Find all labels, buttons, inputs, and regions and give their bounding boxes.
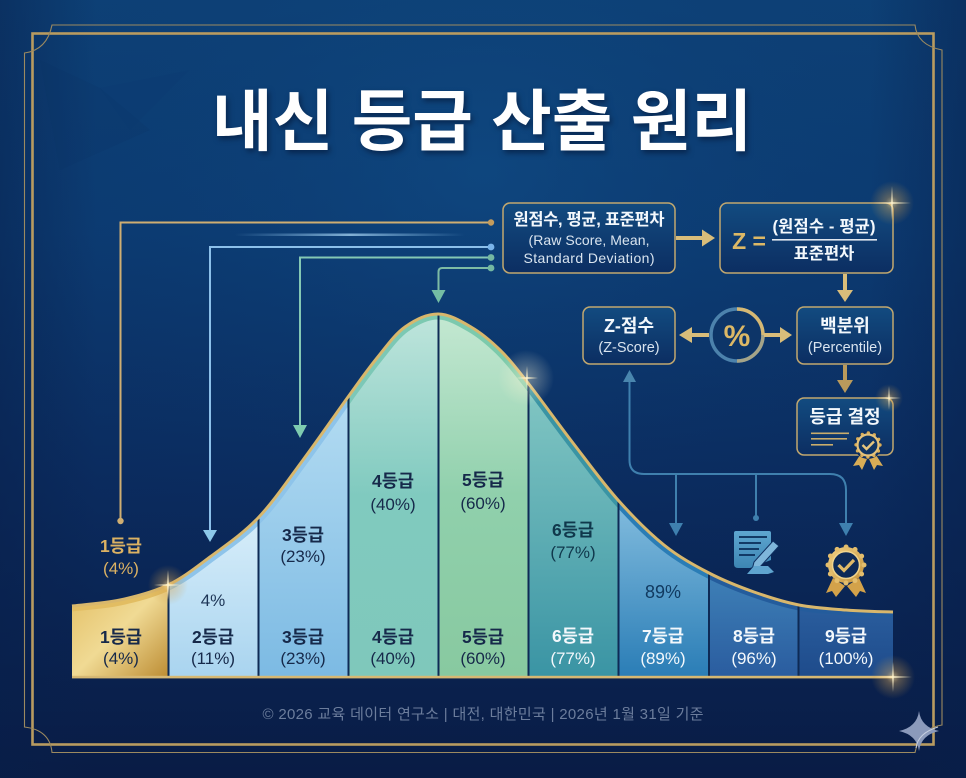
box: inputs: (Raw Score, Mean, bbox=[528, 232, 650, 248]
connector: gold line to grade 1 bbox=[117, 219, 494, 524]
box: z formula bbox=[720, 203, 893, 273]
connector: green line to peak bbox=[432, 265, 494, 303]
arrow: percentile to grade bbox=[837, 365, 853, 393]
box: percentile: 백분위 bbox=[820, 316, 870, 336]
label: grade 2: 2등급 bbox=[192, 627, 234, 647]
icon: large medal bbox=[826, 547, 866, 597]
box: z formula: Z = bbox=[732, 228, 766, 254]
label: grade 6 bbox=[550, 626, 596, 668]
labels inside columns bbox=[100, 626, 873, 668]
grade 3 label: (23%) bbox=[280, 547, 326, 566]
label: grade 9: 9등급 bbox=[825, 626, 867, 646]
curve outline bbox=[72, 314, 893, 612]
label: grade 2 bbox=[191, 627, 235, 668]
bell curve chart bbox=[72, 310, 893, 678]
label: grade 9: (100%) bbox=[819, 649, 873, 668]
title: 내신 등급 산출 원리 bbox=[212, 85, 752, 160]
label: grade 7 bbox=[640, 626, 686, 668]
label: grade 9 bbox=[819, 626, 873, 668]
baseline bbox=[72, 676, 893, 678]
label: grade 5: (60%) bbox=[460, 649, 506, 668]
grade 1 gold label bbox=[100, 536, 142, 578]
box: inputs: Standard Deviation) bbox=[524, 250, 654, 266]
arrow: formula to percentile bbox=[837, 274, 853, 302]
label: grade 4: (40%) bbox=[370, 649, 416, 668]
box: inputs: 원점수, 평균, 표준편차 bbox=[514, 210, 664, 229]
label: grade 6: 6등급 bbox=[552, 626, 594, 646]
grade 2 value: 4% bbox=[201, 591, 225, 610]
box: grade decision: 등급 결정 bbox=[809, 407, 881, 427]
box: inputs bbox=[503, 203, 675, 273]
box: z-score bbox=[583, 307, 675, 364]
label: grade 4: 4등급 bbox=[372, 627, 414, 647]
label: grade 1: (4%) bbox=[103, 649, 139, 668]
grade 6 label: 6등급 bbox=[552, 520, 594, 540]
box: z-score: Z-점수 bbox=[604, 316, 654, 336]
grade 4 label bbox=[370, 471, 416, 514]
sparkle: curve left bbox=[148, 565, 188, 605]
arrow: ring to z-score bbox=[679, 327, 709, 343]
box: percentile bbox=[797, 307, 893, 364]
grade 1 gold label: 1등급 bbox=[100, 536, 142, 556]
light streak bbox=[235, 234, 465, 236]
grade 4 label: 4등급 bbox=[372, 471, 414, 491]
grade 5 label: 5등급 bbox=[462, 470, 504, 490]
sparkle: curve right bbox=[498, 350, 554, 406]
label: grade 8: (96%) bbox=[731, 649, 777, 668]
watermark star bbox=[899, 711, 939, 751]
label: grade 8: 8등급 bbox=[733, 626, 775, 646]
box: z formula: (원점수 - 평균) bbox=[772, 217, 876, 236]
grade 4 label: (40%) bbox=[370, 495, 416, 514]
box: z-score: (Z-Score) bbox=[598, 340, 660, 356]
arrow: inputs to formula bbox=[676, 230, 715, 246]
grade 7 value: 89% bbox=[645, 582, 681, 602]
label: grade 6: (77%) bbox=[550, 649, 596, 668]
connector: green line to grade 3 bbox=[293, 254, 494, 438]
box: grade decision bbox=[797, 398, 893, 455]
label: grade 2: (11%) bbox=[191, 649, 235, 668]
box: z formula: 표준편차 bbox=[794, 244, 854, 263]
footer: © 2026 교육 데이터 연구소 | 대전, 대한민국 | 2026년 1월 31일 기준 bbox=[262, 706, 704, 723]
label: grade 3: (23%) bbox=[280, 649, 326, 668]
grade 6 label: (77%) bbox=[550, 543, 596, 562]
label: grade 7: (89%) bbox=[640, 649, 686, 668]
grade columns bbox=[72, 310, 893, 677]
sparkle: grade box bbox=[875, 384, 903, 412]
grade 3 label bbox=[280, 525, 326, 566]
arrow: ring to percentile bbox=[764, 327, 792, 343]
grade 5 label bbox=[460, 470, 506, 513]
label: grade 3: 3등급 bbox=[282, 627, 324, 647]
percent ring icon: % bbox=[724, 320, 750, 353]
label: grade 1 bbox=[100, 627, 142, 668]
label: grade 1: 1등급 bbox=[100, 627, 142, 647]
connector: blue network to z-score and grades bbox=[623, 370, 853, 536]
label: grade 5: 5등급 bbox=[462, 627, 504, 647]
label: grade 8 bbox=[731, 626, 777, 668]
label: grade 5 bbox=[460, 627, 506, 668]
labels above columns bbox=[100, 470, 681, 610]
icon: document and pen bbox=[734, 531, 779, 574]
grade 6 label bbox=[550, 520, 596, 562]
grade 1 gold label: (4%) bbox=[103, 559, 139, 578]
grade 3 label: 3등급 bbox=[282, 525, 324, 545]
grade 5 label: (60%) bbox=[460, 494, 506, 513]
label: grade 3 bbox=[280, 627, 326, 668]
sparkle: baseline right bbox=[871, 655, 915, 699]
label: grade 7: 7등급 bbox=[642, 626, 684, 646]
icon: small medal bbox=[853, 431, 883, 470]
box: percentile: (Percentile) bbox=[808, 340, 882, 356]
label: grade 4 bbox=[370, 627, 416, 668]
sparkle: formula box bbox=[870, 181, 914, 225]
percent ring icon bbox=[711, 309, 763, 361]
connector: blue line to grade 2 bbox=[203, 244, 494, 542]
